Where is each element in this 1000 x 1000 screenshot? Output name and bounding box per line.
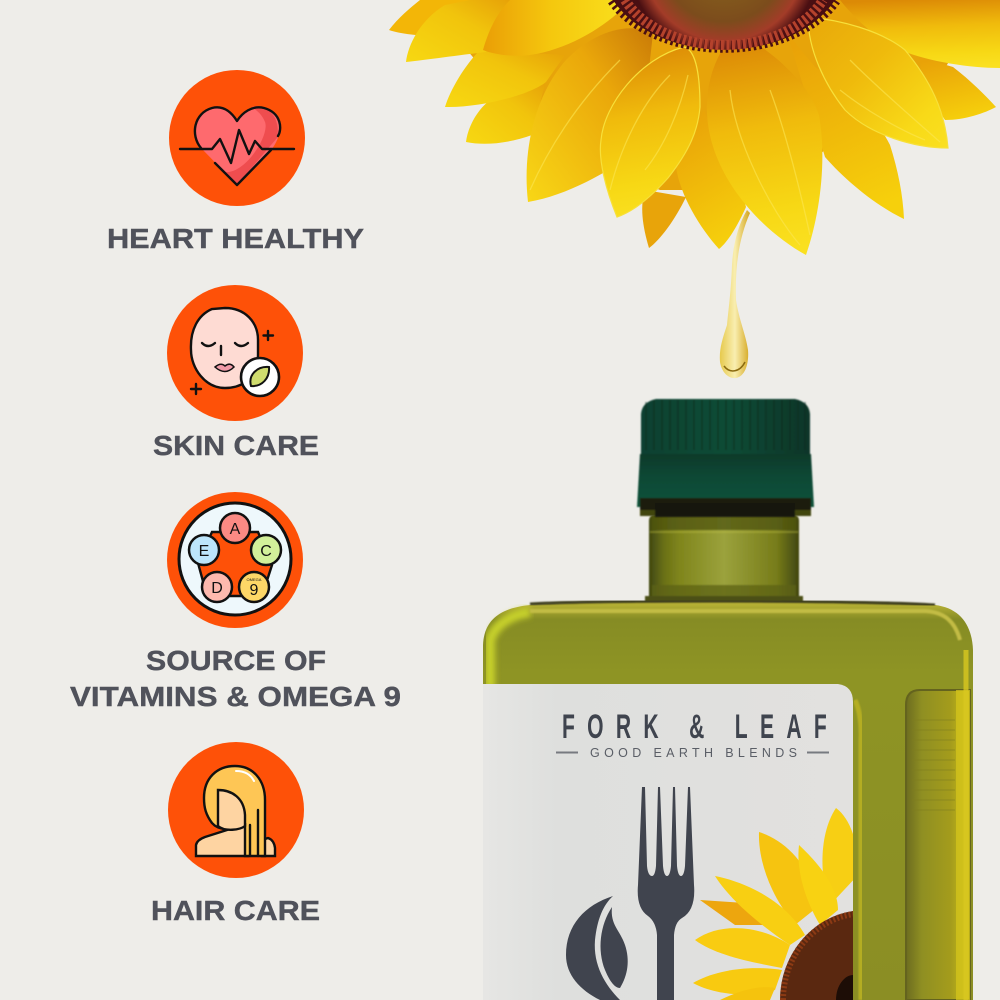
benefit: hair care: [151, 742, 320, 926]
oil drip: [720, 210, 750, 378]
vitamin E: E: [199, 543, 209, 560]
vitamin A: A: [230, 521, 241, 538]
bottle cap: [637, 399, 814, 517]
label: SOURCE OF: [146, 645, 326, 676]
seed head: [613, 0, 835, 50]
benefit: vitamins: [70, 492, 401, 712]
bottle: [483, 399, 973, 1000]
icon: face: [167, 285, 303, 421]
label: [70, 645, 401, 712]
brand name: FORK & LEAF: [562, 707, 827, 745]
icon: heart: [169, 70, 305, 206]
label sunflower: [693, 808, 858, 1000]
vitamin omega 9: [239, 572, 269, 602]
bottle neck: [645, 515, 803, 605]
vitamin D: D: [211, 580, 223, 597]
benefit: heart healthy: [107, 70, 364, 254]
bottle grip: [906, 690, 970, 1000]
vitamin C: C: [260, 543, 272, 560]
icon: hair: [168, 742, 304, 878]
vitamin omega 9: 9: [250, 582, 259, 599]
label: VITAMINS & OMEGA 9: [70, 681, 401, 712]
sunflower: [389, 0, 1000, 255]
tagline: GOOD EARTH BLENDS: [590, 746, 797, 760]
benefit: skin care: [153, 285, 319, 461]
bottle body: [483, 601, 973, 1000]
vitamin omega 9: OMEGA: [247, 577, 262, 582]
label: HAIR CARE: [151, 895, 320, 926]
label: HEART HEALTHY: [107, 223, 364, 254]
icon: vitamin ring: [167, 492, 303, 628]
icon: fork: [638, 787, 694, 1000]
bottle label: [483, 684, 858, 1000]
icon: leaf: [566, 896, 628, 1000]
label: SKIN CARE: [153, 430, 319, 461]
